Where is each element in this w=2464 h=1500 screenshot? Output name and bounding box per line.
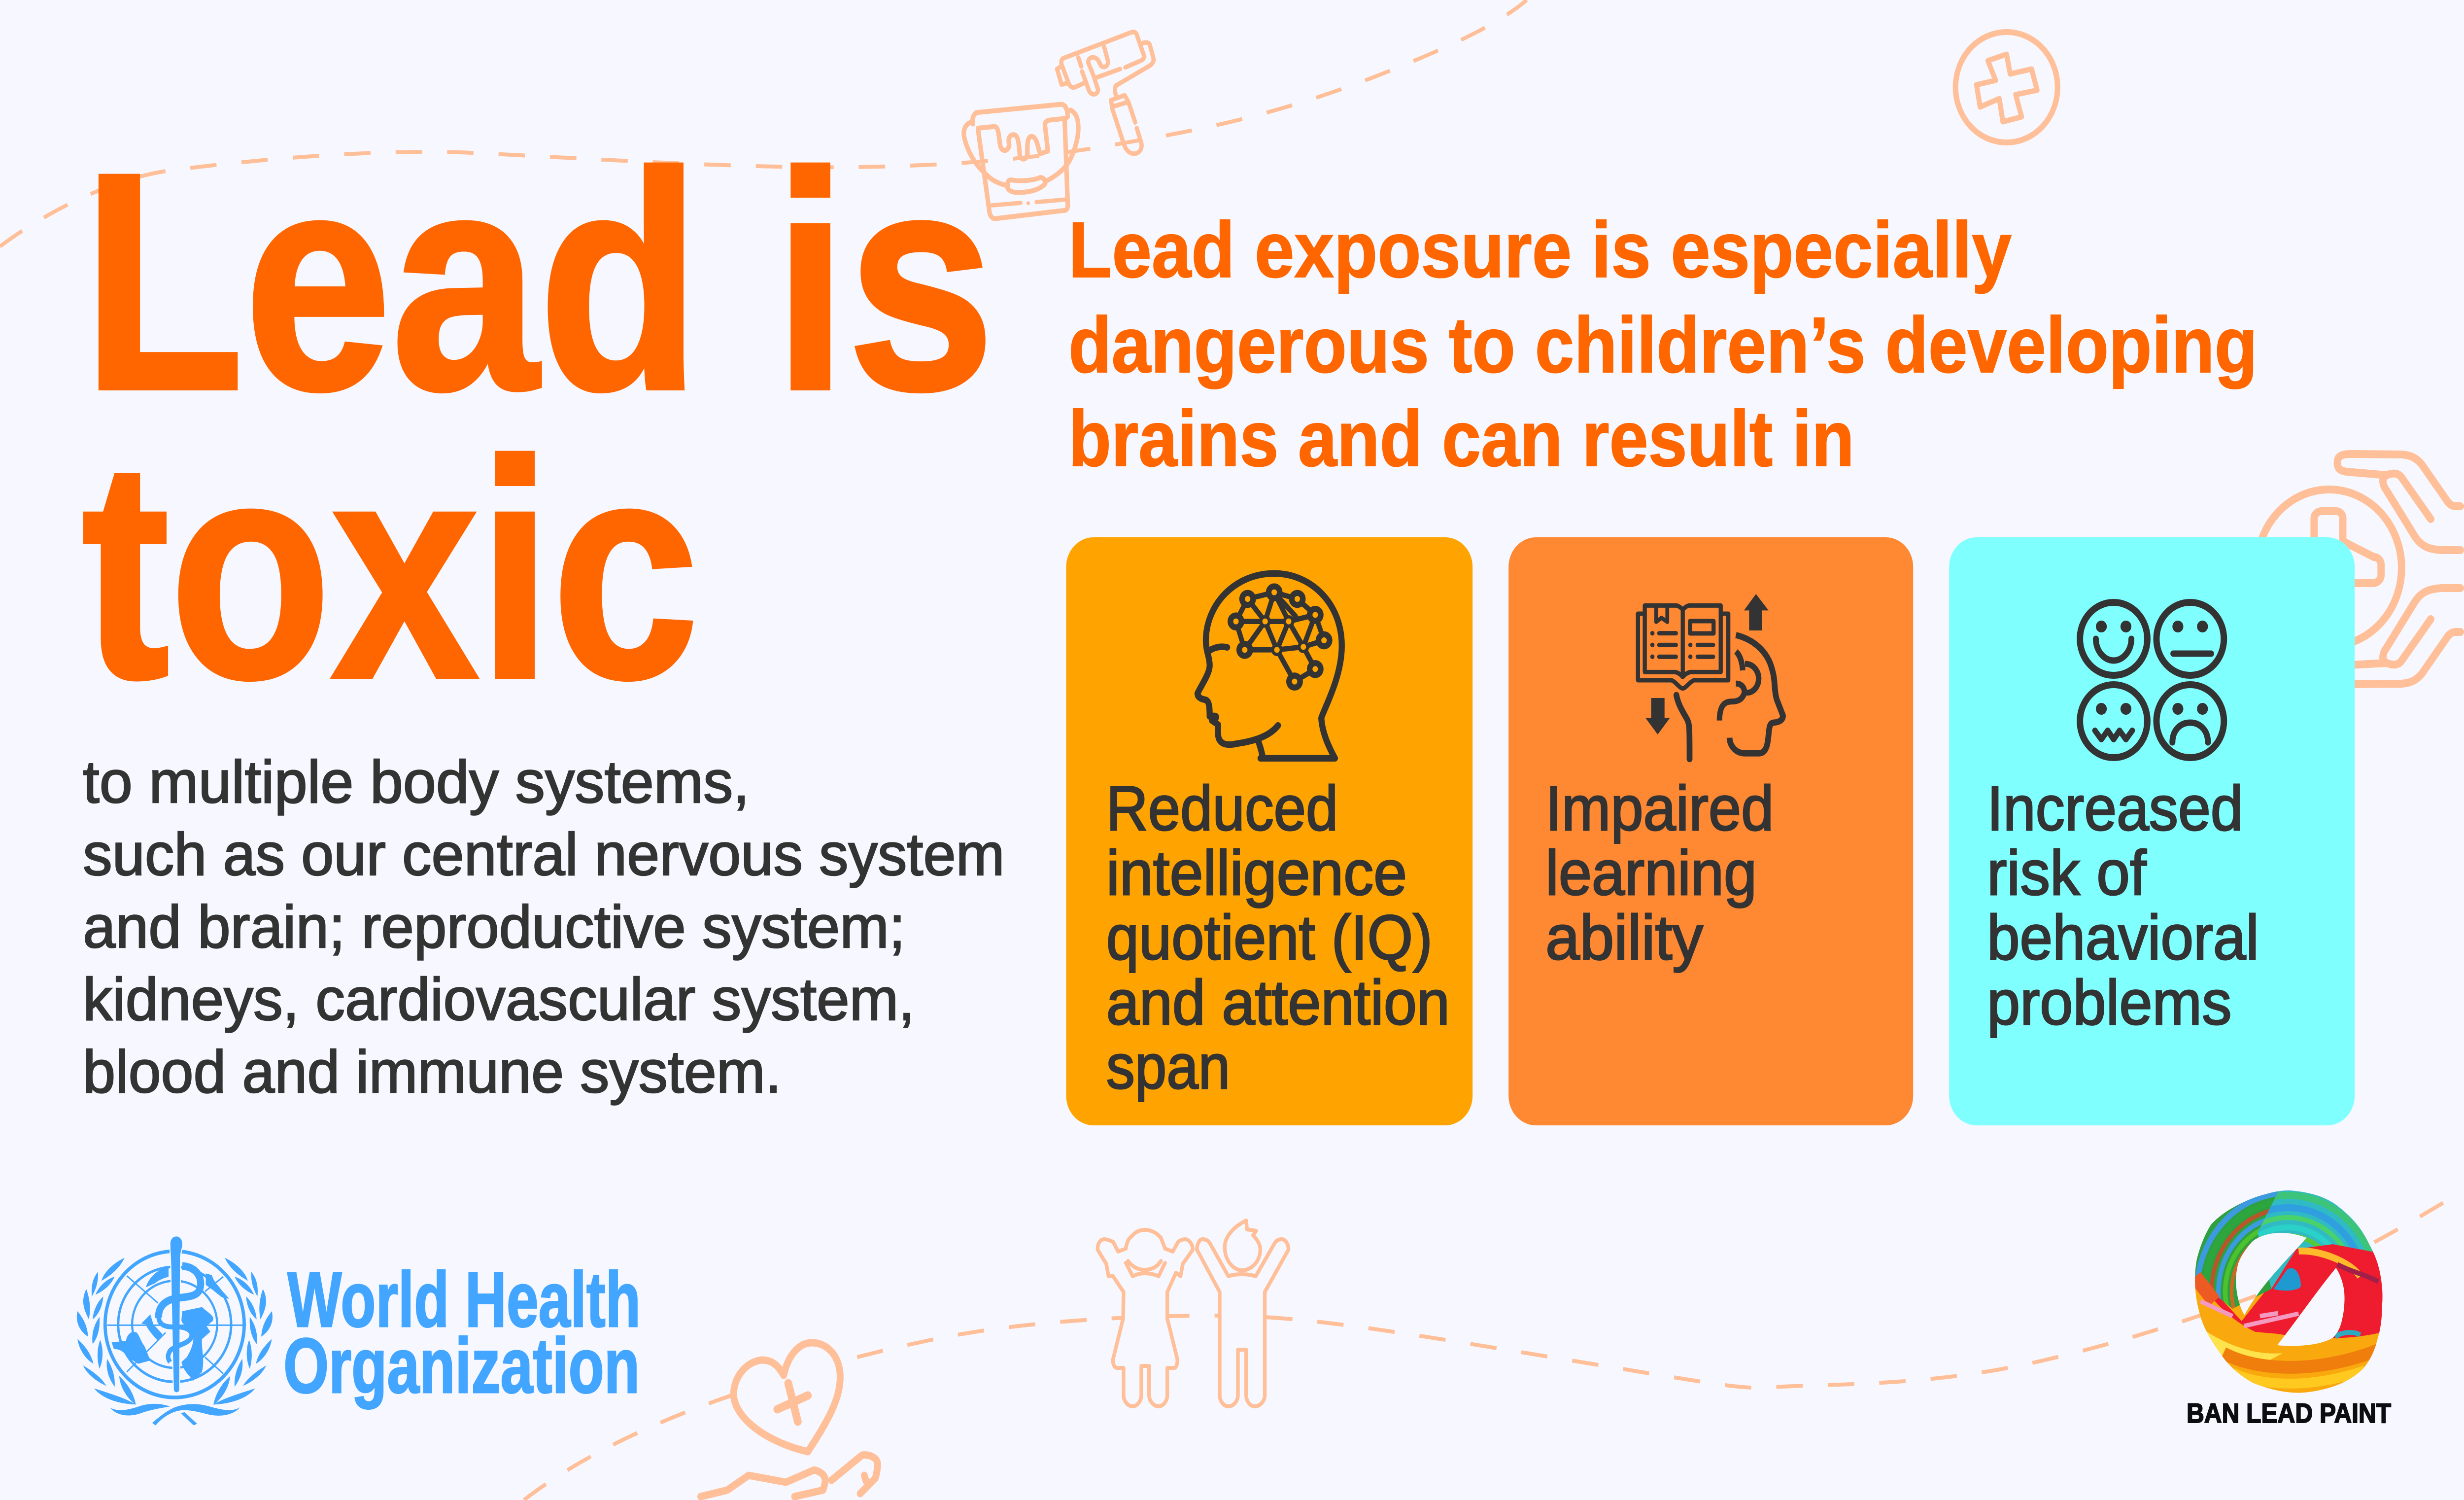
card text: and attention <box>1106 968 1450 1038</box>
title <box>81 108 994 742</box>
title: Lead is <box>82 108 994 454</box>
card text <box>1106 773 1450 1102</box>
text block: body systems: kidneys, cardiovascular system, <box>83 966 915 1033</box>
card text: span <box>1106 1032 1230 1102</box>
logo: World Health Organization <box>77 1236 641 1426</box>
dashed path: top <box>0 0 1527 246</box>
icon: four faces <box>2080 602 2224 758</box>
icon: heart with plus <box>734 1343 840 1452</box>
card: impaired learning <box>1508 537 1913 1125</box>
wreath: right leaves <box>213 1258 273 1405</box>
text block: body systems: such as our central nervous system <box>83 821 1005 888</box>
logo: Ban Lead Paint <box>2187 1183 2392 1429</box>
icon: paint bucket <box>964 105 1078 219</box>
icon: book and head with arrows <box>1638 594 1783 759</box>
heading: children's brains: dangerous to children’s developing <box>1068 301 2258 389</box>
text block: body systems <box>83 748 1005 1105</box>
paint ring <box>2195 1190 2383 1393</box>
wreath: left leaves <box>77 1258 136 1405</box>
card text: ability <box>1545 903 1703 973</box>
dashed path: bottom <box>524 1191 2462 1500</box>
card text: behavioral <box>1987 903 2259 973</box>
heading: children's brains: Lead exposure is especially <box>1068 206 2012 294</box>
card text <box>1987 773 2259 1038</box>
text block: body systems: to multiple body systems, <box>83 748 750 815</box>
card text: intelligence <box>1106 838 1407 908</box>
icon: paint roller <box>1057 32 1154 154</box>
icon: head with brain network <box>1198 573 1342 758</box>
card text: Reduced <box>1106 773 1338 844</box>
icon: supporting hand <box>701 1455 878 1497</box>
card: behavioral problems <box>1949 537 2355 1125</box>
text block: body systems: blood and immune system. <box>83 1038 782 1105</box>
heading: children's brains: brains and can result in <box>1068 395 1854 483</box>
card text <box>1545 773 1774 973</box>
card text: quotient (IQ) <box>1106 903 1433 973</box>
card text: Impaired <box>1545 773 1774 844</box>
text block: body systems: and brain; reproductive system; <box>83 893 905 960</box>
card text: problems <box>1987 968 2231 1038</box>
wordmark: Organization <box>283 1323 640 1409</box>
ribbon <box>110 1404 240 1426</box>
title: toxic <box>81 397 699 742</box>
emblem <box>77 1236 273 1426</box>
card: reduced IQ <box>1066 537 1472 1125</box>
card text: risk of <box>1987 838 2147 908</box>
wordmark <box>283 1256 641 1409</box>
icon: plus in circle <box>1955 32 2057 142</box>
icon: girl <box>1097 1230 1193 1406</box>
icon: boy <box>1197 1221 1289 1406</box>
card text: Increased <box>1987 773 2243 844</box>
heading: children's brains <box>1068 206 2258 483</box>
wordmark: World Health <box>287 1256 641 1343</box>
card text: learning <box>1545 838 1757 908</box>
icon: caring hands with plus <box>2257 454 2461 684</box>
wordmark: BAN LEAD PAINT <box>2187 1398 2391 1429</box>
